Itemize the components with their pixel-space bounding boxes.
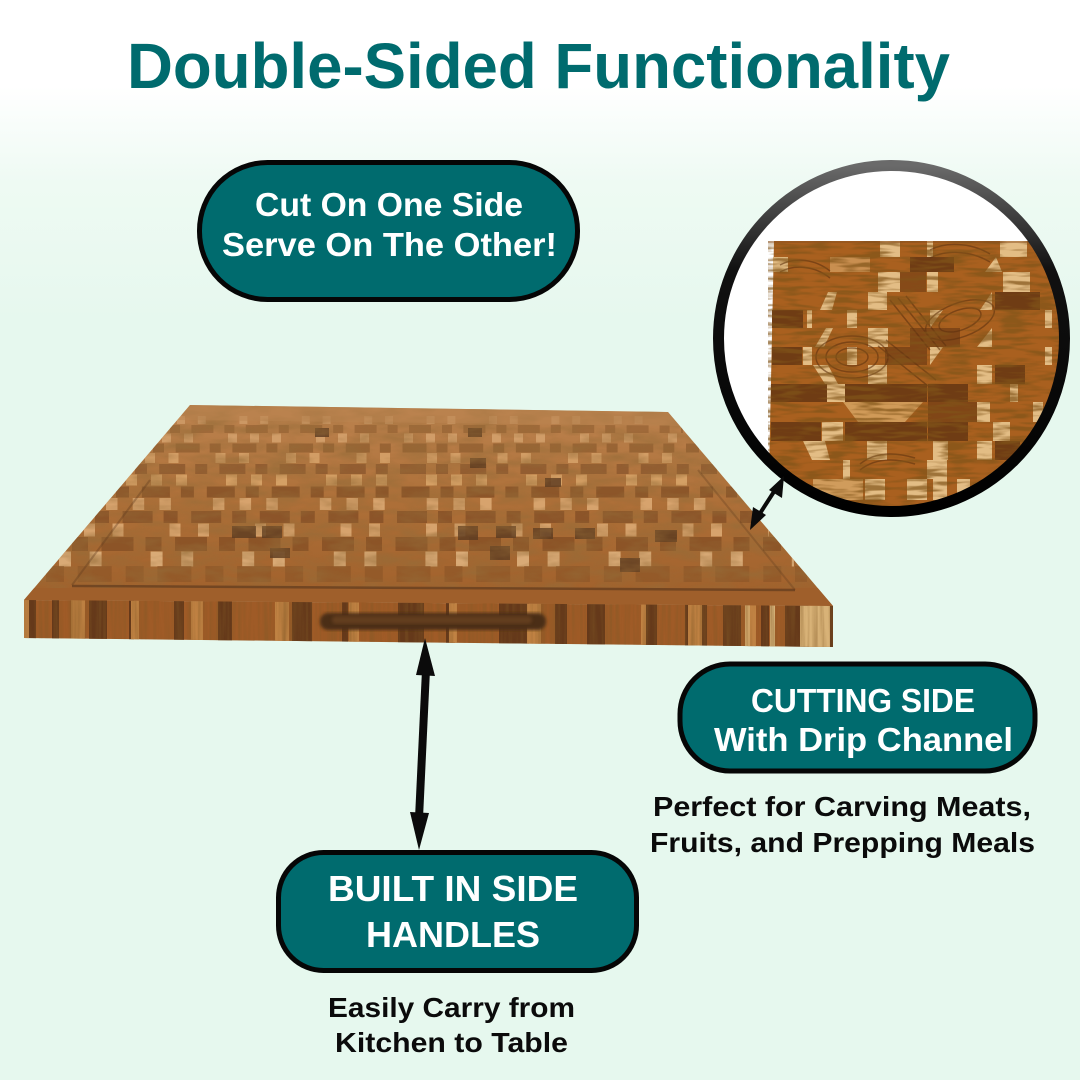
handle slot <box>320 613 546 630</box>
dark tiles <box>232 428 677 572</box>
title: Double-Sided Functionality <box>127 30 950 102</box>
text: cutting side description <box>650 791 1035 858</box>
callout: cutting side: CUTTING SIDE <box>751 682 975 719</box>
text: cutting side description: Perfect for Carving Meats, <box>653 791 1031 822</box>
callout: cut on one side <box>200 162 578 300</box>
light tiles <box>773 241 1052 500</box>
callout: cutting side: With Drip Channel <box>714 721 1013 758</box>
arrow: inset to board <box>750 476 784 530</box>
callout: built in side handles: BUILT IN SIDE <box>328 868 578 909</box>
callout: cut on one side: Cut On One Side <box>255 186 523 223</box>
rim fade <box>178 405 680 426</box>
inset wood detail <box>768 241 1070 520</box>
callout: cutting side <box>680 664 1035 771</box>
cutting board photo <box>20 400 840 650</box>
text: cutting side description: Fruits, and Prepping Meals <box>650 827 1035 858</box>
board top face <box>20 400 840 610</box>
inset zoom circle <box>718 166 1070 520</box>
drip channel <box>72 470 795 590</box>
board front edge <box>24 600 833 647</box>
wood grain texture <box>20 400 840 610</box>
dark tiles <box>771 257 1040 460</box>
text: handles description <box>328 992 575 1058</box>
text: handles description: Easily Carry from <box>328 992 575 1023</box>
growth ring swirls <box>780 244 1000 470</box>
light end stripes <box>770 606 775 646</box>
callout: built in side handles: HANDLES <box>366 914 540 955</box>
inset grain texture <box>768 241 1070 520</box>
inset ring <box>718 166 1064 512</box>
arrow: handle <box>410 638 435 850</box>
callout: cut on one side: Serve On The Other! <box>222 226 557 263</box>
text: handles description: Kitchen to Table <box>335 1027 568 1058</box>
callout: built in side handles <box>278 852 636 970</box>
